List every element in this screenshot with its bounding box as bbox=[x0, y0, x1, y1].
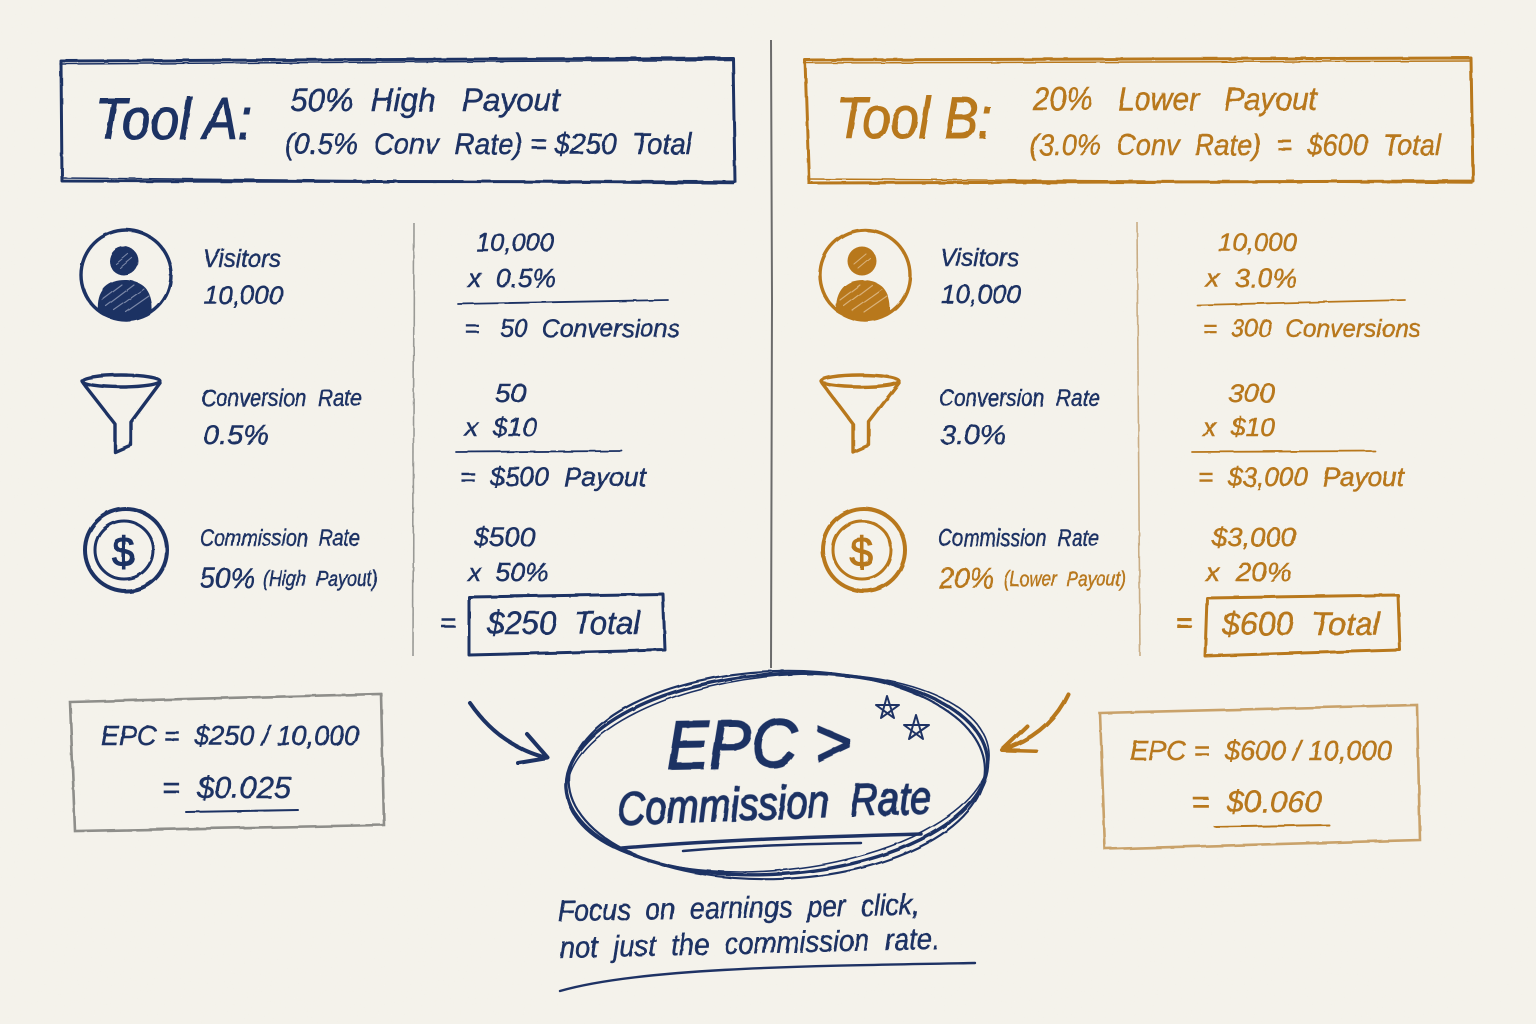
Tool A header text: (0.5% Conv Rate) = $250 Total bbox=[285, 128, 693, 161]
calculation: payout A: = $500 Payout bbox=[460, 462, 647, 492]
calculation: total A bbox=[440, 522, 665, 655]
visitors label: Visitors bbox=[203, 245, 281, 273]
conversion label B: 3.0% bbox=[940, 420, 1006, 450]
tagline: not just the commission rate. bbox=[559, 923, 940, 965]
icon: funnel B bbox=[821, 375, 899, 452]
Tool A header text: 50% High Payout bbox=[290, 82, 561, 118]
icon: coin A bbox=[85, 509, 167, 591]
calculation: total A: $250 Total bbox=[486, 605, 641, 641]
tagline underline bbox=[560, 963, 975, 991]
panel: Tool A bbox=[60, 58, 735, 656]
calculation: payout A: 50 bbox=[495, 378, 527, 408]
icon: person B bbox=[820, 230, 910, 320]
icon: coin B: $ bbox=[850, 528, 873, 575]
calculation: total A: = bbox=[440, 607, 456, 638]
calculation: payout B: x $10 bbox=[1201, 412, 1276, 442]
calculation: total B: = bbox=[1176, 607, 1192, 638]
Tool B header box bbox=[804, 58, 1473, 183]
visitors label B: Visitors bbox=[940, 244, 1019, 272]
calculation: conversions B: x 3.0% bbox=[1204, 263, 1297, 293]
calculation: payout B: 300 bbox=[1228, 378, 1276, 408]
callout: EPC Tool B: = $0.060 bbox=[1191, 784, 1322, 819]
Tool A header text bbox=[285, 82, 693, 161]
conversion label bbox=[201, 385, 362, 450]
Tool A header box bbox=[60, 58, 735, 184]
calculation: conversions A bbox=[458, 229, 680, 343]
Tool A title: Tool A: bbox=[95, 87, 252, 152]
Tool B header text: (3.0% Conv Rate) = $600 Total bbox=[1030, 129, 1442, 162]
calculation: total A: x 50% bbox=[466, 557, 548, 587]
central EPC message bbox=[557, 654, 999, 991]
column divider A bbox=[413, 223, 414, 656]
panel: Tool B bbox=[804, 58, 1473, 656]
heading: EPC greater than: EPC > bbox=[666, 704, 852, 784]
center divider line bbox=[771, 40, 772, 668]
calculation: conversions A: 10,000 bbox=[476, 229, 554, 257]
icon: stars bbox=[876, 696, 929, 739]
icon: coin A: $ bbox=[112, 528, 135, 575]
commission label: 50% bbox=[200, 563, 255, 595]
visitors label B bbox=[940, 244, 1022, 309]
commission label: Commission Rate bbox=[200, 525, 360, 552]
calculation: conversions B: 10,000 bbox=[1218, 229, 1297, 257]
commission label B: (Lower Payout) bbox=[1004, 568, 1126, 591]
icon: coin B bbox=[823, 509, 905, 591]
Tool B header text bbox=[1030, 81, 1442, 162]
double underline bbox=[622, 834, 921, 851]
visitors label B: 10,000 bbox=[941, 279, 1022, 309]
callout: EPC Tool A: = $0.025 bbox=[162, 770, 292, 805]
Tool B header text: 20% Lower Payout bbox=[1032, 81, 1318, 117]
conversion label B bbox=[939, 385, 1100, 450]
tagline bbox=[558, 889, 940, 965]
visitors label: 10,000 bbox=[204, 280, 284, 310]
calculation: total B bbox=[1176, 522, 1400, 656]
conversion label: 0.5% bbox=[203, 420, 269, 450]
commission label: (High Payout) bbox=[263, 566, 378, 591]
Tool B title: Tool B: bbox=[836, 86, 992, 151]
calculation: payout B bbox=[1192, 378, 1405, 492]
commission label bbox=[200, 525, 378, 595]
calculation: payout A: x $10 bbox=[463, 412, 538, 442]
calculation: total B: $600 Total bbox=[1221, 606, 1381, 642]
visitors label bbox=[203, 245, 284, 310]
icon: person A bbox=[81, 230, 171, 320]
callout: EPC Tool B bbox=[1100, 705, 1420, 849]
conversion label: Conversion Rate bbox=[201, 385, 362, 412]
calculation: conversions A: = 50 Conversions bbox=[465, 315, 680, 343]
scribbled ellipse bbox=[557, 654, 999, 892]
commission label B: Commission Rate bbox=[938, 525, 1099, 552]
heading: Commission Rate: Commission Rate bbox=[617, 771, 932, 835]
callout: EPC Tool A: EPC = $250 / 10,000 bbox=[101, 720, 359, 751]
callout: EPC Tool B: EPC = $600 / 10,000 bbox=[1130, 735, 1392, 766]
icon: funnel A bbox=[82, 375, 160, 452]
callout: EPC Tool A bbox=[70, 694, 384, 831]
conversion label B: Conversion Rate bbox=[939, 385, 1100, 412]
calculation: total B: x 20% bbox=[1204, 557, 1292, 587]
commission label B: 20% bbox=[938, 563, 994, 595]
arrow: Tool B to EPC bbox=[1002, 694, 1068, 751]
tagline: Focus on earnings per click, bbox=[558, 889, 920, 928]
calculation: payout B: = $3,000 Payout bbox=[1198, 462, 1405, 492]
commission label B bbox=[938, 525, 1126, 595]
calculation: conversions B bbox=[1197, 229, 1421, 343]
calculation: total A: $500 bbox=[473, 522, 536, 552]
calculation: conversions B: = 300 Conversions bbox=[1203, 315, 1421, 343]
calculation: total B: $3,000 bbox=[1211, 522, 1297, 552]
column divider B bbox=[1137, 222, 1140, 656]
calculation: conversions A: x 0.5% bbox=[466, 263, 556, 293]
arrow: Tool A to EPC bbox=[470, 703, 548, 763]
calculation: payout A bbox=[456, 378, 647, 492]
